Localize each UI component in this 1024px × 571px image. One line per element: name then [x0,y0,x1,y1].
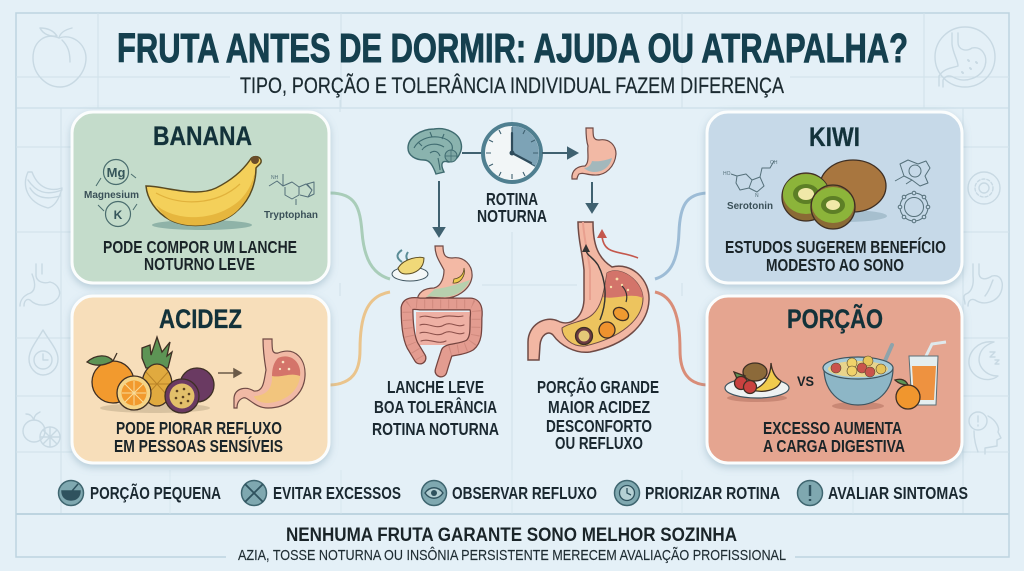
icon: minerals: Magnesium [84,189,139,201]
icon: stomach watermark [935,27,995,87]
connector: banana to center [330,193,390,279]
text: porcao grande list: MAIOR ACIDEZ [548,397,650,417]
icon: serotonin molecule [723,160,778,212]
body text: PODE COMPOR UM LANCHE [103,237,297,257]
icon: moon watermark [969,342,999,380]
body text: ESTUDOS SUGEREM BENEFÍCIO [725,236,946,257]
heading: PORÇÃO [787,303,883,334]
label: rotina noturna: ROTINA [486,189,538,209]
icon: tryptophan molecule [264,174,318,221]
body text: PODE PIORAR REFLUXO [116,418,282,438]
card background [707,296,962,463]
text: lanche leve list: ROTINA NOTURNA [372,419,499,439]
card background [72,296,329,463]
icon: minerals: Mg [107,165,125,180]
heading: KIWI [809,122,860,152]
body text: EM PESSOAS SENSÍVEIS [114,435,283,456]
icon: kiwi fruits [782,160,887,229]
legend row [58,480,968,506]
icon: acidic fruits [87,337,214,413]
icon: serotonin molecule: OH [770,160,778,166]
legend item: porcao pequena: PORÇÃO PEQUENA [90,482,221,503]
icon: apple watermark [33,28,86,87]
connector: kiwi to center [655,193,707,279]
icon: fruit watermark [23,412,60,447]
icon: juice glass and orange [895,342,946,409]
icon: serotonin molecule: N [755,193,759,199]
icon: banana [146,156,261,230]
panel: porcao [707,296,962,463]
legend item: avaliar sintomas [798,480,968,506]
panel: acidez [72,296,329,463]
connector: acidez to center [330,292,390,385]
heading: ACIDEZ [159,304,242,334]
legend item: observar refluxo: OBSERVAR REFLUXO [452,483,597,503]
center flow [372,124,659,453]
card background [707,112,962,283]
arrow: clock to stomach [542,148,577,158]
label: rotina noturna: NOTURNA [477,206,547,226]
legend item: avaliar sintomas: AVALIAR SINTOMAS [828,483,968,503]
text: lanche leve list: LANCHE LEVE [387,377,484,397]
body text: NOTURNO LEVE [144,254,255,274]
icon: stomach with acid [234,339,305,408]
text: lanche leve list [372,377,499,439]
footer note: AZIA, TOSSE NOTURNA OU INSÔNIA PERSISTENTE MERECEM AVALIAÇÃO PROFISSIONAL [238,547,786,564]
icon: brain [408,129,461,174]
arrow [218,369,241,377]
connector: brain to clock [462,152,482,154]
text: porcao grande list: PORÇÃO GRANDE [537,376,659,397]
icon: drop with clock watermark [29,330,58,375]
label: rotina noturna [477,189,547,226]
icon: reflux stomach watermark [964,264,1002,306]
body text: EXCESSO AUMENTA [763,418,902,438]
legend item: porcao pequena [58,480,221,506]
panel: banana [72,112,329,283]
heading: BANANA [153,121,252,151]
arrow: brain down [434,181,444,236]
icon: large bowl [823,345,893,410]
legend item: priorizar rotina [614,480,780,506]
card background [72,112,329,283]
icon: serotonin molecule: Serotonin [727,200,773,212]
icon: minerals [84,160,139,226]
icon: small stomach [572,128,616,179]
subtitle: TIPO, PORÇÃO E TOLERÂNCIA INDIVIDUAL FAZEM DIFERENÇA [240,73,784,98]
icon: small plate [725,363,789,402]
footer headline: NENHUMA FRUTA GARANTE SONO MELHOR SOZINHA [286,525,737,546]
icon: tryptophan molecule: Tryptophan [264,209,318,221]
arrow: stomach down [587,182,597,212]
icon: snack plate [392,250,428,281]
icon: light snack stomach [417,246,472,308]
connector: porcao to center [655,292,707,385]
icon: intestines [407,303,476,371]
text: porcao grande list [537,376,659,453]
icon: banana watermark [25,172,62,208]
text: porcao grande list: OU REFLUXO [555,433,643,453]
icon: clock [483,124,541,182]
text: porcao grande list: DESCONFORTO [546,416,652,436]
icon: stomach watermark left [20,264,60,306]
vs label: VS [797,373,814,389]
legend item: observar refluxo [422,480,597,506]
body text: A CARGA DIGESTIVA [763,436,905,456]
text: lanche leve list: BOA TOLERÂNCIA [374,396,497,417]
icon: molecules [895,160,930,223]
panel: kiwi [707,112,962,283]
icon: head watermark [969,412,1001,454]
icon: tryptophan molecule: NH [271,175,279,181]
body text: MODESTO AO SONO [766,255,904,275]
icon: gear molecule watermark [968,172,1000,204]
icon: serotonin molecule: HO [723,171,731,177]
legend item: priorizar rotina: PRIORIZAR ROTINA [645,483,780,503]
icon: large reflux stomach [528,222,649,360]
legend item: evitar excessos: EVITAR EXCESSOS [273,483,401,503]
icon: minerals: K [114,208,123,222]
legend item: evitar excessos [242,480,401,506]
